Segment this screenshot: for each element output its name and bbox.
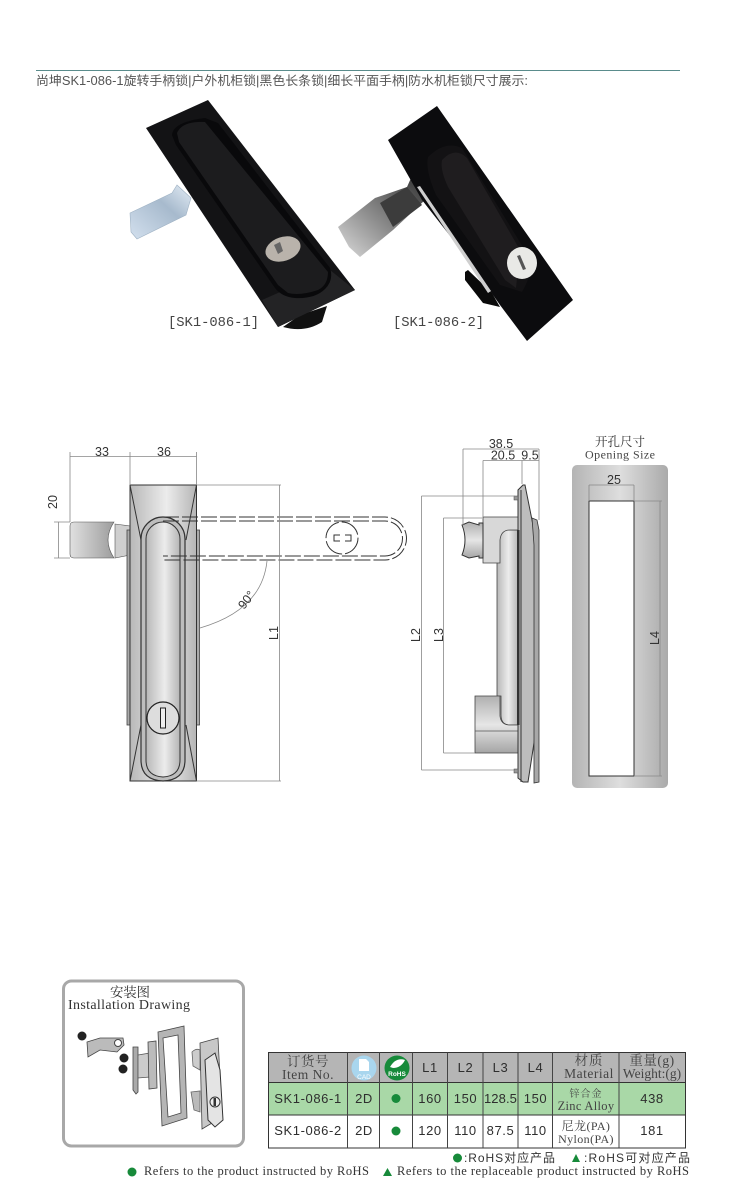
spec table: L2	[458, 1060, 473, 1075]
legend: RoHS line cn: :RoHS对应产品	[464, 1150, 555, 1165]
lock	[147, 702, 179, 734]
legend: RoHS line cn	[453, 1150, 690, 1165]
title cn: 开孔尺寸	[595, 434, 645, 449]
drawing: opening size: L4	[648, 631, 662, 645]
spec table: Material	[564, 1066, 614, 1081]
exploded parts	[78, 1026, 223, 1129]
drawing: front view with dimensions	[46, 445, 406, 781]
page heading: 尚坤SK1-086-1旋转手柄锁|户外机柜锁|黑色长条锁|细长平面手柄|防水机柜锁尺寸展示:	[36, 73, 528, 88]
label: SK1-086-2: [SK1-086-2]	[393, 315, 484, 331]
spec table: SK1-086-1	[274, 1091, 342, 1106]
top divider line	[36, 70, 680, 72]
lower block	[475, 696, 518, 753]
drawing: front view with dimensions: 20	[46, 495, 60, 509]
spec table: 87.5	[487, 1123, 514, 1138]
spec table: L4	[528, 1060, 543, 1075]
lever zinc	[130, 185, 191, 239]
installation title en: Installation Drawing	[68, 998, 190, 1013]
drawing: opening size	[572, 434, 668, 788]
icon: RoHS	[384, 1056, 410, 1080]
drawing: side view with dimensions	[409, 437, 539, 783]
title en: Opening Size	[585, 448, 655, 462]
spec table: 438	[640, 1091, 664, 1106]
spec table: 110	[524, 1123, 547, 1138]
panel: installation drawing	[64, 981, 244, 1146]
legend: RoHS line en	[128, 1164, 689, 1178]
lock cylinder	[262, 232, 304, 266]
spec table: 订货号	[287, 1053, 329, 1069]
dimension lines	[54, 452, 281, 781]
lock cylinder	[507, 247, 537, 279]
legend: RoHS line en: Refers to the product instructed by RoHS	[144, 1164, 369, 1178]
spec table: 锌合金	[570, 1087, 602, 1100]
spec table: 150	[524, 1091, 547, 1106]
spec table: 181	[640, 1123, 664, 1138]
drawing: side view with dimensions: L2	[409, 628, 423, 642]
drawing: front view with dimensions: 33	[95, 445, 109, 459]
legend: RoHS line en: Refers to the replaceable product instructed by RoHS	[397, 1164, 689, 1178]
handle	[141, 517, 185, 781]
spec table: 2D	[355, 1091, 373, 1106]
icon: RoHS: RoHS	[388, 1071, 407, 1078]
drawing: side view with dimensions: 20.5	[491, 448, 515, 462]
product photo: SK1-086-1	[130, 100, 355, 329]
lever head	[462, 522, 483, 558]
installation title cn: 安装图	[110, 984, 150, 1000]
icon: CAD: CAD	[357, 1074, 371, 1081]
lever steel	[338, 178, 425, 257]
plate	[518, 485, 536, 782]
icon: CAD	[352, 1056, 376, 1081]
drawing: front view with dimensions: 36	[157, 445, 171, 459]
drawing: side view with dimensions: L3	[432, 628, 446, 642]
drawing: opening size: 25	[607, 473, 621, 487]
drawing: front view with dimensions: L1	[267, 626, 281, 640]
spec table: L1	[422, 1060, 438, 1075]
drawing: side view with dimensions: 38.5	[489, 437, 513, 451]
spec table: SK1-086-2	[274, 1123, 342, 1138]
spec table: L3	[493, 1060, 508, 1075]
spine	[497, 530, 518, 725]
lever	[115, 524, 130, 558]
spec table: Item No.	[282, 1067, 334, 1082]
label: SK1-086-1: [SK1-086-1]	[168, 315, 259, 331]
spec table: 110	[454, 1123, 477, 1138]
spec table: 材质	[574, 1052, 604, 1068]
spec table: 尼龙(PA)	[562, 1118, 610, 1133]
rotated handle dashed outline	[163, 517, 406, 560]
highlighted row	[268, 1083, 686, 1115]
dimension lines	[422, 449, 539, 770]
legend: RoHS line cn: :RoHS可对应产品	[584, 1150, 690, 1165]
spec table: 160	[418, 1091, 442, 1106]
spec table: 重量(g)	[629, 1053, 675, 1068]
spec table: 150	[454, 1091, 477, 1106]
plain row	[268, 1115, 686, 1148]
spec table: 2D	[355, 1123, 373, 1138]
spec table: 128.5	[484, 1091, 517, 1106]
spec table: Nylon(PA)	[558, 1132, 614, 1146]
drawing: side view with dimensions: 9.5	[521, 448, 539, 462]
drawing: front view with dimensions: 90°	[235, 588, 258, 612]
spec table: Weight:(g)	[623, 1066, 681, 1081]
spec table	[268, 1052, 686, 1148]
table header row	[268, 1052, 686, 1082]
spec table: Zinc Alloy	[558, 1099, 615, 1113]
spec table: 120	[418, 1123, 442, 1138]
upper block	[483, 517, 518, 563]
plate	[130, 485, 196, 781]
side flanges	[127, 530, 131, 725]
product photo: SK1-086-2	[338, 106, 573, 341]
